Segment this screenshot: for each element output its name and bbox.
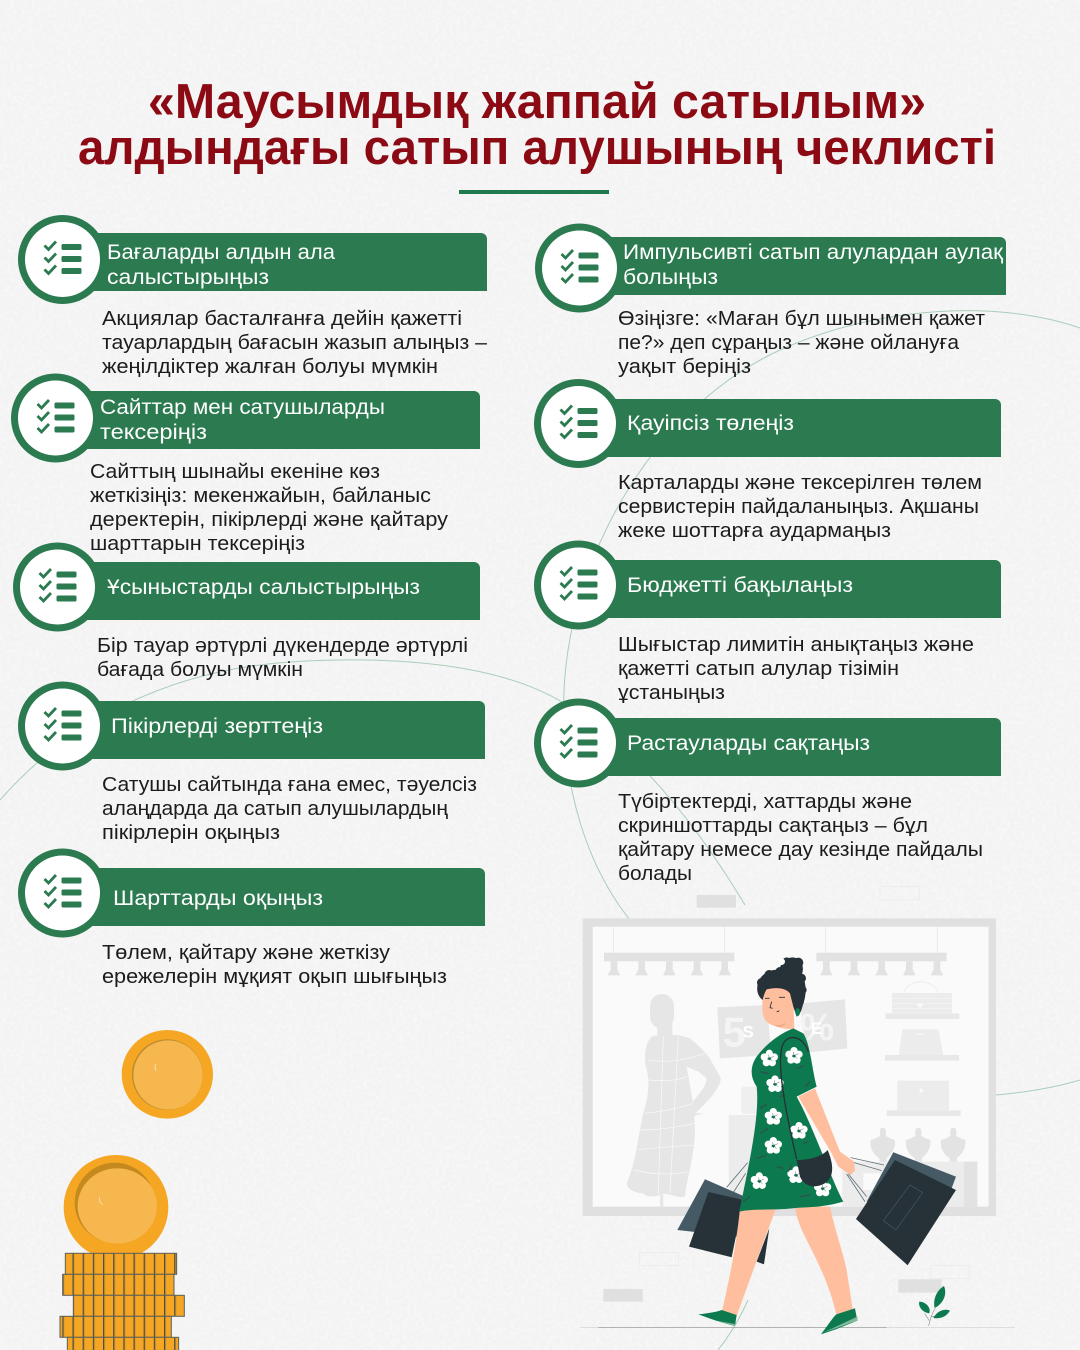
icon: falling coin — [122, 1030, 213, 1119]
heading: compare offers: Ұсыныстарды салыстырыңыз — [107, 575, 420, 599]
heading: compare prices: салыстырыңыз — [107, 265, 269, 289]
icon: checklist — [11, 374, 100, 462]
text: pay safely: сервистерін пайдаланыңыз. Ақшаны — [618, 495, 979, 518]
purse and strap — [780, 1038, 832, 1186]
dress — [739, 1028, 843, 1212]
title: «Маусымдық жаппай сатылым» — [148, 75, 926, 129]
neck and face — [762, 987, 794, 1029]
panel: control budget — [534, 540, 1001, 704]
title — [78, 75, 996, 175]
mannequin — [627, 994, 721, 1207]
panel: keep receipts — [534, 698, 1001, 885]
shop window: % — [800, 1006, 834, 1049]
illustration: shop window with shopper — [580, 887, 1015, 1334]
text: compare prices: жеңілдіктер жалған болуы мүмкін — [102, 355, 438, 378]
text: check sites: шарттарын тексеріңіз — [90, 532, 305, 555]
text: avoid impulse purchases: Өзіңізге: «Маған бұл шынымен қажет — [618, 307, 986, 330]
shop window: 5 — [723, 1009, 746, 1056]
heading: keep receipts: Растауларды сақтаңыз — [627, 731, 870, 755]
shoes — [698, 1308, 858, 1334]
text: read terms: ережелерін мұқият оқып шығыңыз — [102, 965, 447, 988]
icon: checklist — [18, 848, 107, 938]
decorative thin arcs — [0, 311, 1080, 1350]
shop window: E — [811, 1019, 822, 1038]
text: control budget: ұстаныңыз — [618, 681, 725, 704]
heading: avoid impulse purchases: болыңыз — [623, 265, 718, 289]
text: keep receipts — [618, 790, 983, 885]
heading: compare prices — [107, 240, 335, 289]
dress flowers — [751, 1047, 831, 1196]
panel: compare prices — [18, 215, 488, 378]
text: control budget: Шығыстар лимитін анықтаңыз және — [618, 633, 974, 656]
icon: checklist — [535, 224, 624, 312]
panel: research reviews — [18, 682, 485, 844]
icon: coin stack — [60, 1155, 184, 1350]
woman shopper — [698, 957, 858, 1334]
text: check sites: деректерін, пікірлерді және қайтару — [90, 508, 449, 531]
heading: avoid impulse purchases — [623, 240, 1004, 289]
panel: avoid impulse purchases — [535, 224, 1006, 378]
icon: checklist — [13, 542, 102, 632]
text: avoid impulse purchases: уақыт беріңіз — [618, 355, 751, 378]
text: read terms: Төлем, қайтару және жеткізу — [102, 941, 391, 964]
text: compare offers — [97, 634, 468, 681]
text: compare prices: тауарлардың бағасын жазып алыңыз – — [102, 331, 488, 354]
text: pay safely: Карталарды және тексерілген төлем — [618, 471, 982, 494]
icon: checklist — [18, 682, 107, 770]
heading: check sites: Сайттар мен сатушыларды — [100, 395, 385, 419]
icon: checklist — [18, 215, 107, 304]
text: compare prices — [102, 307, 488, 378]
text: research reviews: Сатушы сайтында ғана емес, тәуелсіз — [102, 773, 477, 796]
text: avoid impulse purchases: пе?» деп сұраңыз – және ойлануға — [618, 331, 960, 354]
text: research reviews — [102, 773, 477, 844]
heading: read terms: Шарттарды оқыңыз — [113, 886, 323, 910]
shop window: S — [743, 1023, 754, 1042]
legs — [722, 1207, 853, 1316]
icon: checklist — [534, 540, 623, 630]
sale signs — [717, 999, 847, 1058]
icon: checklist — [534, 379, 623, 468]
text: read terms — [102, 941, 447, 988]
text: control budget: қажетті сатып алулар тізімін — [618, 657, 899, 680]
title divider — [459, 190, 609, 194]
text: avoid impulse purchases — [618, 307, 986, 378]
dress leaves — [743, 1066, 810, 1202]
heading: research reviews: Пікірлерді зерттеңіз — [111, 714, 323, 738]
icon: checklist — [534, 698, 623, 788]
face details — [765, 958, 800, 1016]
text: keep receipts: қайтару немесе дау кезінде пайдалы — [618, 838, 983, 861]
text: compare offers: бағада болуы мүмкін — [97, 658, 303, 681]
text: research reviews: пікірлерін оқыңыз — [102, 821, 280, 844]
shop window — [583, 918, 996, 1216]
text: check sites — [90, 460, 449, 555]
heading: control budget: Бюджетті бақылаңыз — [627, 573, 853, 597]
wall bricks — [603, 887, 969, 1302]
hair — [757, 957, 807, 1017]
heading: check sites: тексеріңіз — [100, 420, 207, 444]
heading: avoid impulse purchases: Импульсивті сатып алулардан аулақ — [623, 240, 1004, 264]
panel: pay safely — [534, 379, 1001, 542]
shopping bags — [677, 1152, 956, 1265]
panel: check sites — [11, 374, 480, 555]
text: keep receipts: скриншоттарды сақтаңыз – бұл — [618, 814, 928, 837]
text: keep receipts: болады — [618, 862, 692, 885]
text: pay safely: жеке шоттарға аудармаңыз — [618, 519, 891, 542]
display shelves — [729, 993, 977, 1207]
text: control budget — [618, 633, 974, 704]
panel: compare offers — [13, 542, 480, 681]
panel: read terms — [18, 848, 485, 988]
text: check sites: жеткізіңіз: мекенжайын, байланыс — [90, 484, 431, 507]
text: compare offers: Бір тауар әртүрлі дүкендерде әртүрлі — [97, 634, 468, 657]
text: keep receipts: Түбіртектерді, хаттарды және — [618, 790, 912, 813]
arm — [798, 1088, 855, 1175]
icon: plant — [919, 1286, 950, 1326]
text: research reviews: алаңдарда да сатып алушылардың — [102, 797, 449, 820]
text: check sites: Сайттың шынайы екеніне көз — [90, 460, 380, 483]
ground line — [580, 1326, 1015, 1328]
title: алдындағы сатып алушының чеклисті — [78, 121, 996, 175]
heading: check sites — [100, 395, 385, 444]
heading: pay safely: Қауіпсіз төлеңіз — [627, 411, 794, 435]
text: pay safely — [618, 471, 982, 542]
heading: compare prices: Бағаларды алдын ала — [107, 240, 335, 264]
text: compare prices: Акциялар басталғанға дейін қажетті — [102, 307, 462, 330]
